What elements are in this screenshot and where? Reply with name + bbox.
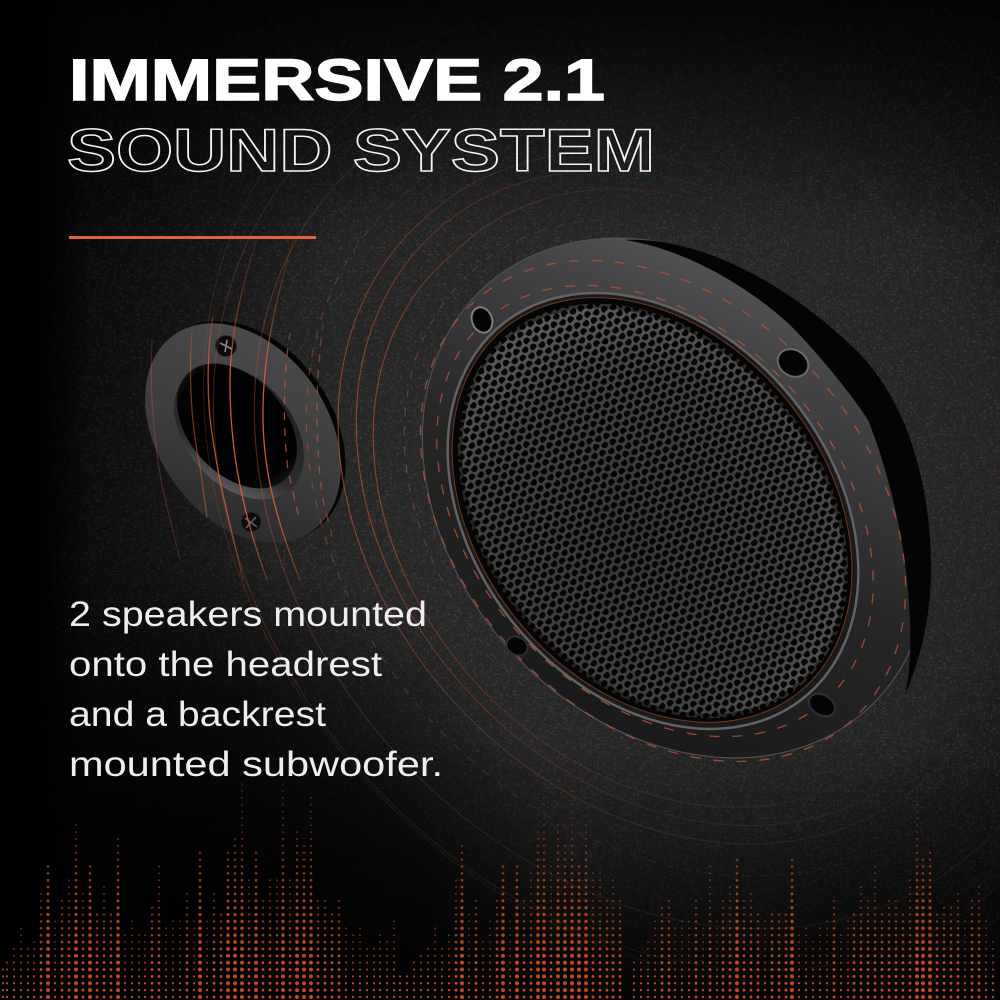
port hole xyxy=(177,364,297,488)
top vignette xyxy=(66,0,1000,212)
port flange xyxy=(145,323,341,542)
sound wave rings xyxy=(204,14,1000,982)
inner lip xyxy=(446,292,860,730)
inner gap xyxy=(452,297,852,723)
body text: mounted subwoofer. xyxy=(69,745,443,784)
large speaker xyxy=(420,238,931,762)
speaker mesh grille xyxy=(458,304,848,718)
title line 2 outlined: SOUND SYSTEM xyxy=(67,117,655,184)
port shadow xyxy=(184,321,346,535)
black crescent on flange edge xyxy=(625,240,931,695)
flange dashes xyxy=(420,260,906,762)
small port speaker xyxy=(145,321,346,542)
title line 1: IMMERSIVE 2.1 xyxy=(69,48,605,113)
wave lines crossing the port xyxy=(151,240,333,580)
speaker flange face xyxy=(422,238,910,758)
equalizer dot columns xyxy=(3,777,993,997)
port rim flare xyxy=(174,368,304,500)
body text: and a backrest xyxy=(69,695,326,734)
mounting holes xyxy=(468,304,839,721)
accent divider xyxy=(69,236,316,239)
body text: 2 speakers mounted xyxy=(69,595,427,634)
port screw top xyxy=(216,336,236,356)
body text: onto the headrest xyxy=(69,645,382,684)
body text xyxy=(69,595,443,784)
port screw bottom xyxy=(241,512,261,532)
